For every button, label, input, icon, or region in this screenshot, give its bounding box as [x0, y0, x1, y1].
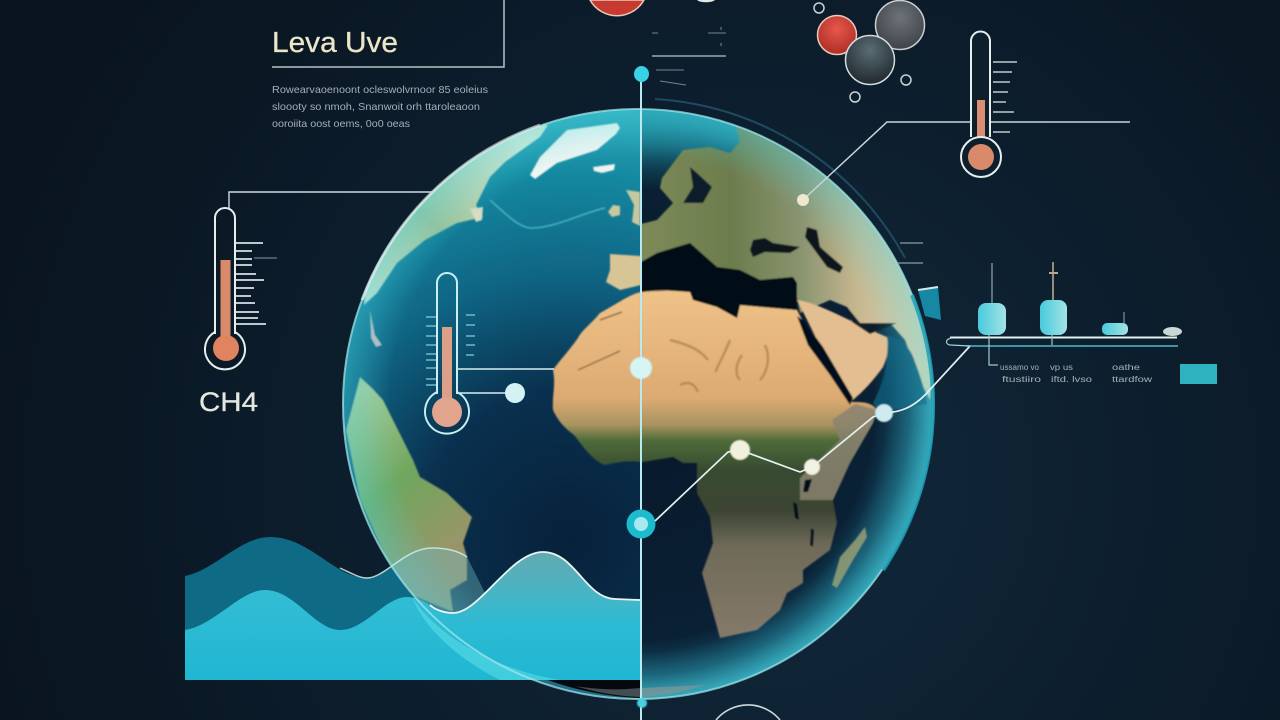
bar labels: vp us	[1050, 363, 1073, 372]
pale crescent: lower left	[575, 686, 640, 697]
front wave area	[185, 552, 640, 680]
wave chart: back wave	[185, 537, 640, 680]
bottom node	[637, 698, 647, 708]
connector network	[229, 122, 1130, 521]
hump highlight	[453, 552, 640, 640]
bar labels: ttardfow	[1112, 375, 1152, 384]
atom: dark	[846, 36, 894, 84]
bar labels: oathe	[1112, 363, 1141, 372]
land: western hemisphere	[346, 118, 641, 612]
bar chart: right	[918, 262, 1217, 384]
thermometer: right	[961, 32, 1017, 177]
thermometer: middle	[425, 273, 475, 434]
small globe fragment	[918, 287, 941, 320]
Newfoundland	[470, 207, 483, 222]
globe rim	[343, 109, 933, 699]
scale ticks	[236, 243, 266, 324]
atom: red	[818, 16, 856, 54]
Eurasia	[641, 122, 935, 400]
title block	[272, 0, 504, 130]
body text: Rowearvaoenoont ocleswolvrnoor 85 eoleius	[272, 84, 488, 96]
link: Eurasia to right thermometer	[805, 122, 1130, 198]
Persian Gulf	[847, 307, 897, 334]
Greenland	[530, 123, 620, 179]
coastal wadi marks	[578, 312, 622, 370]
thermometer: left	[205, 208, 277, 369]
pale crescent: lower right	[642, 685, 705, 697]
right limb band	[883, 295, 933, 570]
data point: Eurasia	[797, 194, 809, 206]
bulb ring	[205, 332, 245, 369]
title frame	[272, 0, 504, 67]
body text	[272, 84, 488, 130]
bulb	[213, 335, 239, 361]
globe outer halo arc	[655, 99, 905, 258]
globe lower rim bright crescent	[412, 597, 560, 680]
wave chart: front wave	[185, 552, 640, 680]
limb glow	[343, 109, 933, 699]
ocean: western hemisphere	[340, 105, 641, 705]
Horn of Africa taupe	[800, 404, 877, 500]
current line	[490, 200, 605, 228]
top data lines	[652, 27, 726, 85]
bar 1	[978, 263, 1006, 365]
back wave crest line	[340, 548, 467, 578]
Madagascar	[832, 527, 867, 588]
molecule	[814, 0, 924, 102]
ocean: eastern hemisphere	[641, 105, 941, 705]
globe	[340, 99, 941, 705]
Indian Ocean	[873, 335, 927, 412]
top atom: pale	[697, 0, 715, 2]
bulb	[432, 397, 462, 427]
crest line	[430, 552, 640, 613]
scale ticks	[426, 315, 475, 385]
data point: East Africa	[804, 459, 820, 475]
faint annotation	[254, 257, 277, 259]
bulb ring	[961, 137, 1001, 177]
bar 2	[1040, 262, 1067, 345]
Caspian Sea	[805, 227, 843, 273]
fragment highlight	[918, 287, 938, 290]
small ring: lower	[850, 92, 860, 102]
bar labels: ftustiiro	[1002, 375, 1042, 384]
side ticks by globe	[897, 243, 923, 263]
Red Sea	[797, 316, 853, 405]
legend swatch	[1180, 364, 1217, 384]
data point: Horn of Africa	[875, 404, 893, 422]
Mediterranean Sea	[641, 243, 797, 318]
top atom: red	[590, 0, 644, 16]
South America	[346, 377, 472, 612]
link: mid thermometer to Africa	[457, 368, 554, 370]
small ring: top	[814, 3, 824, 13]
mercury	[442, 327, 452, 399]
scale ticks	[993, 62, 1017, 132]
East African lakes	[793, 479, 814, 547]
small ring: right	[901, 75, 911, 85]
bar labels: iftd. lvso	[1051, 375, 1093, 384]
central vertical line with nodes	[626, 66, 656, 720]
globe underside below chart	[548, 680, 640, 698]
bar 4	[1163, 327, 1182, 336]
bar 3	[1102, 312, 1128, 335]
land: eastern hemisphere	[641, 122, 935, 638]
data point: central Africa	[730, 440, 750, 460]
title: Leva Uve	[272, 27, 398, 59]
back wave overlay on globe	[393, 548, 484, 612]
bar labels	[1000, 363, 1152, 384]
link: left thermometer	[229, 192, 433, 208]
Sahara wadi marks	[670, 340, 768, 392]
West Africa	[553, 292, 641, 465]
pale land rim	[362, 125, 540, 300]
left cap	[946, 338, 970, 346]
top node	[634, 66, 649, 82]
tube	[215, 208, 235, 334]
link: lower node to data points	[655, 346, 970, 521]
Iceland	[593, 164, 615, 173]
Baltic Sea	[683, 167, 712, 203]
dot	[505, 383, 525, 403]
bulb	[968, 144, 994, 170]
bar labels: ussamo vo	[1000, 363, 1040, 372]
Arabia	[797, 300, 888, 400]
bottom ring	[716, 705, 780, 720]
bulb ring	[425, 392, 469, 434]
atom: gray	[876, 0, 924, 50]
link: mid thermometer to dot	[460, 392, 507, 394]
vertical axis line	[640, 80, 642, 720]
North America	[364, 118, 548, 305]
Pacific island streak	[370, 310, 382, 347]
mercury	[977, 100, 985, 146]
body text: sloooty so nmoh, Snanwoit orh ttaroleaoon	[272, 101, 480, 113]
British Isles	[608, 190, 640, 226]
tube	[971, 32, 990, 137]
mercury	[220, 260, 230, 340]
Black Sea	[750, 238, 800, 257]
Africa	[641, 290, 877, 638]
label: CH4: CH4	[199, 387, 258, 417]
Iberia	[606, 254, 641, 290]
body text: ooroiita oost oems, 0o0 oeas	[272, 118, 410, 130]
ocean: eastern polar teal	[642, 110, 740, 184]
tube	[437, 273, 457, 394]
baseline upper	[950, 336, 1177, 338]
lower node	[626, 510, 656, 538]
baseline lower	[966, 345, 1178, 347]
centre node	[630, 357, 652, 379]
